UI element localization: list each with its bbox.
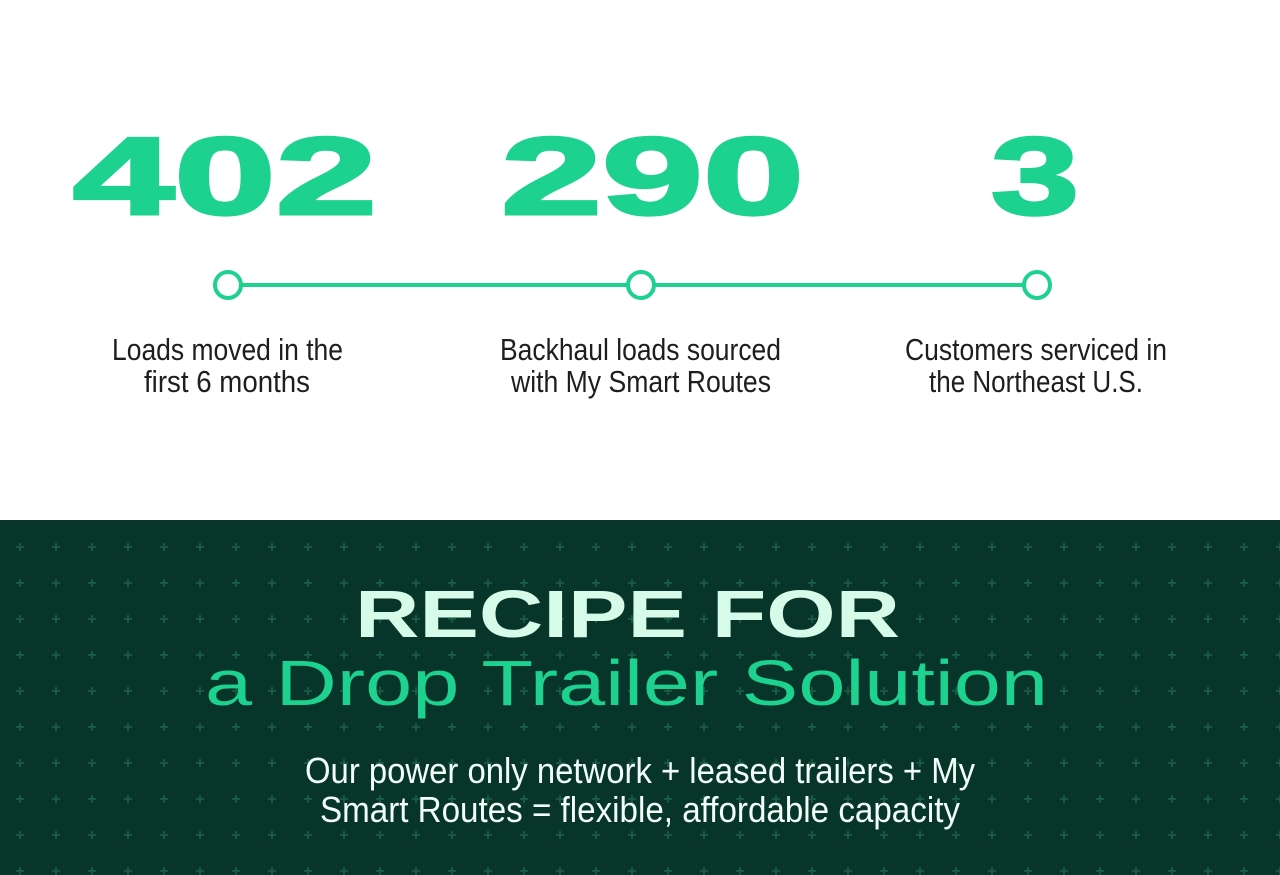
subtitle	[305, 750, 975, 830]
heading: a Drop Trailer Solution: a Drop Trailer Solution	[205, 647, 1048, 719]
stat labels	[112, 332, 1167, 399]
timeline	[215, 272, 1050, 298]
stat numbers	[73, 115, 1079, 238]
label 3	[905, 332, 1167, 399]
number: 3: 3	[991, 115, 1079, 238]
number: 290: 290	[501, 115, 804, 238]
number: 402: 402	[73, 115, 377, 238]
label 1: first 6 months	[144, 364, 310, 399]
dark panel	[0, 520, 1280, 875]
label 2: Backhaul loads sourced	[500, 332, 781, 367]
label 1	[112, 332, 343, 399]
label 2	[500, 332, 781, 399]
label 2: with My Smart Routes	[510, 364, 771, 399]
label 3: the Northeast U.S.	[929, 364, 1143, 399]
subtitle: Smart Routes = flexible, affordable capacity	[320, 789, 960, 830]
label 3: Customers serviced in	[905, 332, 1167, 367]
label 1: Loads moved in the	[112, 332, 343, 367]
subtitle: Our power only network + leased trailers + My	[305, 750, 975, 791]
heading: RECIPE FOR: RECIPE FOR	[355, 577, 900, 652]
